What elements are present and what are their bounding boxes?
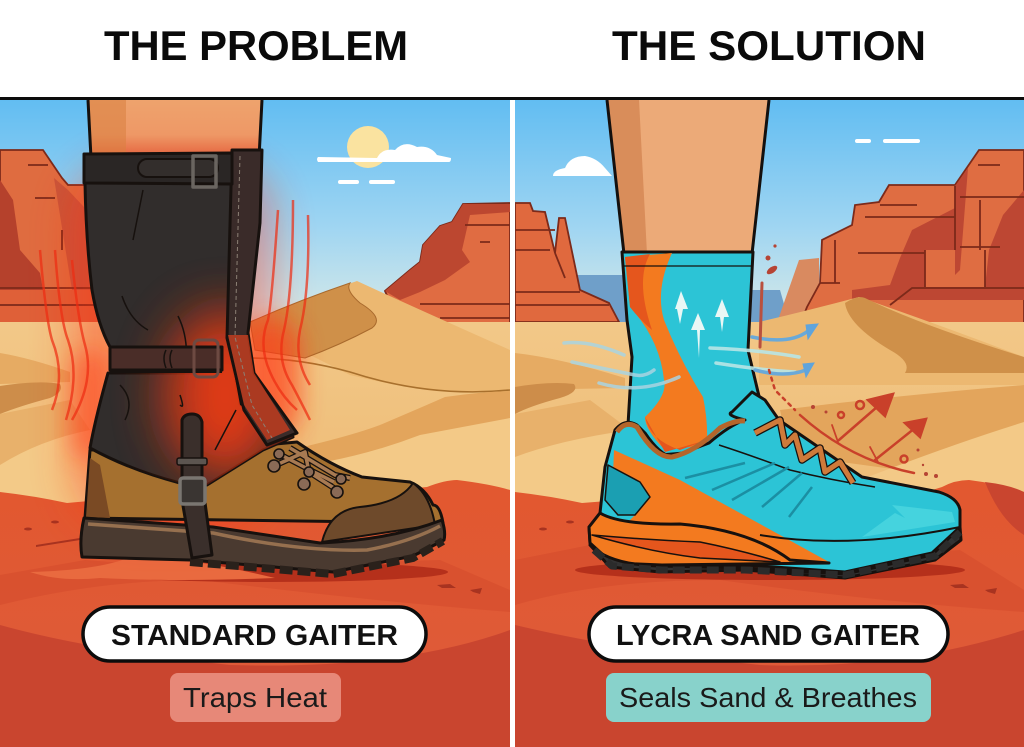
- lower right sand: [330, 418, 510, 490]
- lace outline: [755, 420, 853, 483]
- label: lycra sand gaiter: LYCRA SAND GAITER: [616, 620, 920, 652]
- ground specks: [539, 520, 997, 594]
- label: lycra sand gaiter: [589, 607, 948, 661]
- ground dark area: [515, 625, 1024, 747]
- tag: seals sand and breathes: Seals Sand & Breathes: [619, 682, 917, 713]
- tag: traps heat: [170, 673, 341, 722]
- sun and cloud: [317, 126, 451, 184]
- heel panel: [605, 465, 650, 515]
- sand band: [515, 353, 625, 390]
- ankle strap: [182, 414, 212, 558]
- mesh lines: [685, 463, 812, 517]
- boot heel shade: [86, 458, 110, 518]
- eyestay line: [719, 445, 875, 487]
- sand particles: [765, 244, 938, 478]
- boot upper: [85, 442, 443, 523]
- gaiter: [84, 150, 297, 558]
- sand base: [0, 322, 510, 492]
- lower light sand: [0, 430, 88, 503]
- top buckle: [193, 156, 216, 187]
- shin panel glow: [228, 335, 290, 440]
- shoe upper: [589, 392, 960, 572]
- tag: seals sand and breathes: [606, 673, 931, 722]
- sock gaiter: [622, 252, 765, 455]
- dark sand blob: [0, 382, 61, 414]
- heading: the problem: THE PROBLEM: [104, 22, 408, 69]
- dark sand blob: [515, 383, 575, 414]
- ground mid tone: [0, 560, 510, 612]
- lower right sand: [860, 422, 1024, 525]
- sock body: [622, 252, 765, 455]
- clouds: [553, 139, 920, 176]
- shoe shadow: [575, 560, 965, 580]
- gaiter body: [85, 183, 293, 485]
- panel: the solution: [515, 100, 1024, 747]
- sole: [81, 518, 445, 572]
- top border: [0, 97, 1024, 100]
- right mesa: [385, 203, 510, 325]
- sock cuff line: [623, 265, 752, 267]
- sky: [515, 100, 1024, 330]
- boot shadow: [158, 562, 448, 582]
- distant mountains: [575, 275, 790, 325]
- dune shadow band: [306, 391, 510, 461]
- collar trim: [617, 421, 745, 457]
- sand base: [515, 322, 1024, 522]
- leg: [607, 100, 769, 254]
- ground mid tone: [515, 545, 1024, 612]
- sky: [0, 100, 510, 330]
- outsole: [590, 527, 961, 578]
- running shoe: [589, 392, 961, 578]
- red ground: [0, 480, 510, 666]
- left mid sand: [0, 400, 90, 465]
- orange side stripe: [612, 450, 829, 565]
- left mesa: [515, 203, 619, 322]
- ground dark area: [0, 625, 510, 747]
- main dune: [759, 297, 1024, 385]
- red ground: [515, 480, 1024, 747]
- small rock: [779, 258, 819, 322]
- vent arrows: [675, 291, 729, 358]
- air flow arrows: [564, 324, 818, 388]
- midsole: [589, 513, 829, 565]
- tread: [594, 532, 960, 575]
- ankle buckle: [180, 478, 205, 504]
- eyelets and laces: [268, 448, 350, 498]
- top strap: [84, 153, 232, 184]
- sand deflection arrows: [760, 283, 926, 473]
- middle strap: [110, 347, 222, 370]
- wrinkles: [120, 190, 236, 450]
- tread: [190, 541, 443, 574]
- ground specks: [24, 520, 482, 594]
- right mesa: [800, 150, 1024, 325]
- ground right shade: [985, 482, 1024, 535]
- toe cap: [322, 483, 435, 542]
- divider: [510, 100, 515, 747]
- gaiter shin panel: [227, 150, 297, 445]
- hiking boot: [81, 442, 445, 574]
- middle buckle: [194, 340, 218, 377]
- gaiter inner glow: [165, 310, 285, 480]
- toe rim: [760, 527, 960, 541]
- heat glow: [70, 160, 300, 530]
- label: standard gaiter: STANDARD GAITER: [111, 620, 398, 652]
- lower light sand: [515, 430, 640, 512]
- main dune: [250, 281, 510, 392]
- heading: the solution: THE SOLUTION: [612, 22, 926, 69]
- stitching: [235, 156, 272, 438]
- toe highlight: [862, 505, 955, 537]
- dune shadow band: [780, 385, 1024, 470]
- heat waves: [40, 200, 310, 420]
- sand band: [0, 353, 70, 384]
- left mid sand: [515, 400, 630, 457]
- tag: traps heat: Traps Heat: [183, 682, 327, 713]
- dune ripple: [30, 560, 274, 580]
- leg: [88, 100, 262, 158]
- orange swoop: [625, 253, 707, 450]
- laces: [755, 420, 853, 483]
- panel: the problem: [0, 100, 510, 747]
- label: standard gaiter: [83, 607, 426, 661]
- midsole stripe: [88, 524, 440, 550]
- left mesa: [0, 149, 98, 322]
